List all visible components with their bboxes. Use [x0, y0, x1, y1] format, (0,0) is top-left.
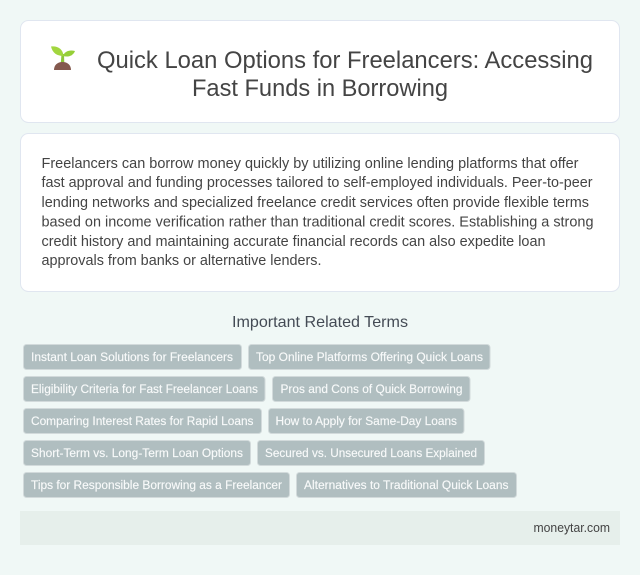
- tag: [248, 344, 490, 370]
- text block: summary: based on income verification rather than traditional credit scores. Establishing a strong: [42, 214, 594, 230]
- panel: summary card: [20, 134, 620, 292]
- title: Quick Loan Options for Freelancers: Accessing: [97, 47, 593, 74]
- tag: [24, 344, 242, 370]
- text block: summary: Freelancers can borrow money quickly by utilizing online lending platforms that offer: [42, 156, 579, 172]
- panel: title card: [20, 20, 620, 122]
- tag: Tips for Responsible Borrowing as a Freelancer: [31, 478, 282, 492]
- tag: Pros and Cons of Quick Borrowing: [280, 382, 462, 396]
- text block: summary: credit history and maintaining accurate financial records can also expedite loan: [42, 234, 546, 250]
- tag: [24, 472, 290, 498]
- tag: Eligibility Criteria for Fast Freelancer Loans: [31, 382, 258, 396]
- tag: [24, 376, 265, 402]
- tag: How to Apply for Same-Day Loans: [276, 414, 457, 428]
- title: Fast Funds in Borrowing: [192, 75, 448, 102]
- footer text: site name: moneytar.com: [534, 521, 610, 535]
- tag list: [24, 344, 516, 498]
- icon: sprout: [51, 46, 75, 70]
- text block: summary: lending networks and specialized freelance credit services often provide flexible terms: [42, 195, 589, 211]
- tag: [268, 408, 464, 434]
- tag: Comparing Interest Rates for Rapid Loans: [31, 414, 254, 428]
- tag: Instant Loan Solutions for Freelancers: [31, 350, 233, 364]
- tag: [24, 408, 262, 434]
- text block: summary: [42, 156, 594, 269]
- tag: Short-Term vs. Long-Term Loan Options: [31, 446, 243, 460]
- tag: [258, 440, 484, 466]
- tag: Secured vs. Unsecured Loans Explained: [265, 446, 477, 460]
- tag: Alternatives to Traditional Quick Loans: [304, 478, 508, 492]
- text block: summary: fast approval and funding processes tailored to self-employed individuals. Peer-to-peer: [42, 175, 593, 191]
- footer bar: [20, 511, 620, 545]
- heading: related terms: Important Related Terms: [232, 314, 408, 331]
- title: [97, 47, 593, 102]
- tag: [272, 376, 470, 402]
- tag: [24, 440, 250, 466]
- text block: summary: approvals from banks or alternative lenders.: [42, 253, 322, 269]
- tag: Top Online Platforms Offering Quick Loans: [256, 350, 483, 364]
- tag: [296, 472, 516, 498]
